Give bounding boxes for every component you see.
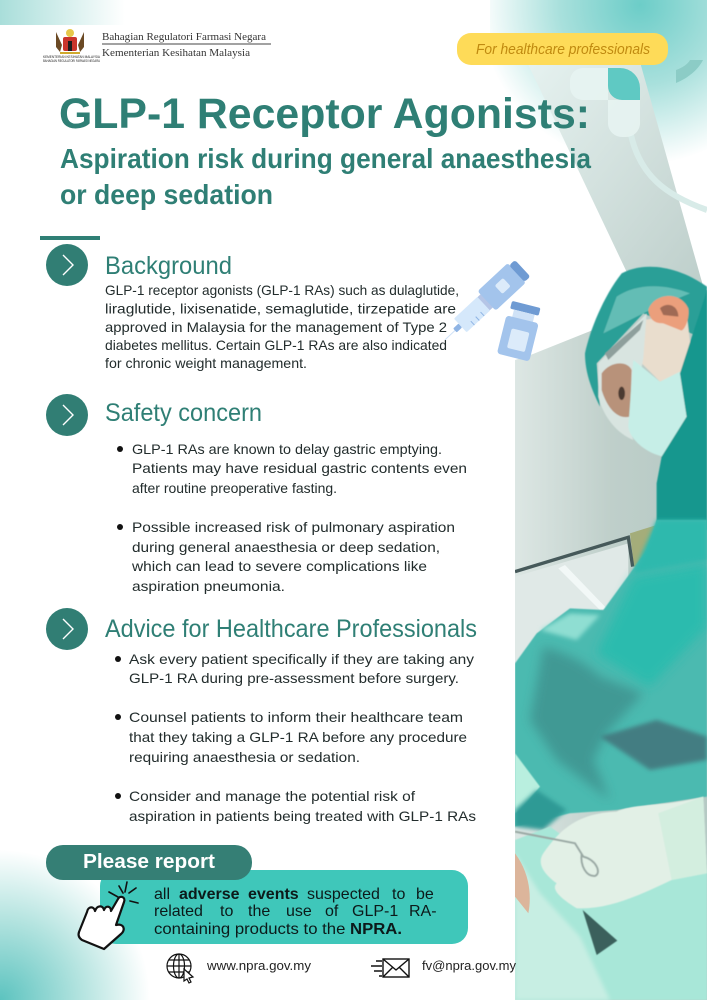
emblem: KEMENTERIAN KESIHATAN MALAYSIA bbox=[43, 55, 101, 59]
text: safety bullets: which can lead to severe complications like bbox=[131, 559, 427, 574]
ministry header: Kementerian Kesihatan Malaysia bbox=[102, 48, 250, 59]
text: safety bullets: aspiration pneumonia. bbox=[132, 579, 285, 594]
text: report instruction: adverse bbox=[179, 886, 240, 903]
scissors bbox=[515, 832, 598, 876]
text: report instruction: use bbox=[286, 903, 312, 920]
surgical photo background bbox=[515, 62, 707, 1000]
text: report instruction: RA- bbox=[409, 903, 437, 920]
surgeon head bbox=[585, 267, 707, 530]
ministry header: Bahagian Regulatori Farmasi Negara bbox=[102, 32, 266, 43]
text: advice bullets bbox=[115, 652, 476, 824]
contact: website: www.npra.gov.my bbox=[206, 958, 311, 973]
audience badge: For healthcare professionals bbox=[476, 41, 650, 58]
subtitle: or deep sedation bbox=[60, 179, 273, 210]
text: advice bullets: Consider and manage the potential risk of bbox=[129, 789, 415, 804]
gloved hand bbox=[515, 797, 707, 908]
text: safety bullets: after routine preoperative fasting. bbox=[132, 481, 337, 496]
badge: please report bbox=[46, 845, 252, 880]
subtitle bbox=[60, 143, 592, 210]
text: report instruction: suspected bbox=[307, 886, 380, 903]
text: advice bullets: Counsel patients to inform their healthcare team bbox=[129, 710, 463, 725]
ceiling arm bbox=[527, 62, 707, 300]
text: advice bullets: GLP-1 RA during pre-assessment before surgery. bbox=[129, 671, 459, 686]
text: advice bullets: that they taking a GLP-1 RA before any procedure bbox=[129, 730, 467, 745]
text: report instruction: containing products to the NPRA. bbox=[154, 921, 402, 938]
text: safety bullets: during general anaesthesia or deep sedation, bbox=[132, 540, 440, 555]
text: report instruction: related bbox=[154, 903, 203, 920]
text: advice bullets: aspiration in patients being treated with GLP-1 RAs bbox=[129, 809, 476, 824]
emblem bbox=[43, 29, 101, 63]
text: report instruction: be bbox=[416, 886, 434, 903]
emblem: BAHAGIAN REGULATORI FARMASI NEGARA bbox=[43, 59, 100, 63]
contact: email bbox=[371, 958, 516, 977]
text: report instruction: GLP-1 bbox=[352, 903, 398, 920]
audience badge bbox=[457, 33, 668, 65]
text: background body: for chronic weight management. bbox=[105, 356, 307, 371]
contact: website bbox=[167, 954, 311, 983]
text: report instruction: of bbox=[325, 903, 339, 920]
logo plus shape bbox=[570, 68, 640, 137]
window and door frame bbox=[515, 526, 655, 638]
corner arc bbox=[676, 60, 703, 83]
text: safety bullets: Patients may have residual gastric contents even bbox=[132, 461, 467, 476]
icon: syringe and vial bbox=[436, 258, 542, 362]
surgical gown bbox=[515, 520, 707, 830]
text: report instruction: to bbox=[392, 886, 405, 903]
icon: chevron circle bbox=[46, 244, 88, 286]
tube bbox=[631, 135, 707, 210]
text: report instruction: all bbox=[154, 886, 170, 903]
text: advice bullets: requiring anaesthesia or sedation. bbox=[129, 750, 360, 765]
icon: envelope bbox=[371, 959, 409, 977]
heading: background: Background bbox=[105, 252, 232, 280]
text: safety bullets: GLP-1 RAs are known to delay gastric emptying. bbox=[132, 442, 442, 457]
text: background body bbox=[105, 283, 459, 371]
panel: background bbox=[46, 244, 459, 371]
text: report instruction bbox=[154, 886, 437, 938]
text: report instruction: to bbox=[220, 903, 233, 920]
text: background body: approved in Malaysia for the management of Type 2 bbox=[105, 320, 447, 335]
wall bbox=[515, 290, 707, 1000]
icon: globe bbox=[167, 954, 193, 983]
panel: please report bbox=[46, 845, 468, 949]
badge: please report: Please report bbox=[83, 850, 215, 873]
lower drape bbox=[515, 827, 707, 1000]
heading: advice: Advice for Healthcare Professionals bbox=[105, 615, 477, 643]
text: report instruction: events bbox=[248, 886, 299, 903]
icon: chevron circle bbox=[46, 608, 88, 650]
ministry header bbox=[43, 29, 271, 63]
panel: advice bbox=[46, 608, 477, 824]
title bbox=[59, 90, 592, 210]
text: report instruction: the bbox=[248, 903, 270, 920]
text: background body: diabetes mellitus. Certain GLP-1 RAs are also indicated bbox=[105, 338, 447, 353]
text: safety bullets: Possible increased risk of pulmonary aspiration bbox=[132, 520, 455, 535]
text: background body: GLP-1 receptor agonists (GLP-1 RAs) such as dulaglutide, bbox=[105, 283, 459, 298]
icon: chevron circle bbox=[46, 394, 88, 436]
panel: safety concern bbox=[46, 394, 467, 594]
heading: safety concern: Safety concern bbox=[105, 399, 262, 427]
text: safety bullets bbox=[117, 442, 467, 594]
subtitle: Aspiration risk during general anaesthesia bbox=[60, 143, 592, 174]
text: background body: liraglutide, lixisenatide, semaglutide, tirzepatide are bbox=[105, 302, 456, 316]
icon: pointing hand bbox=[79, 882, 138, 949]
contact: email: fv@npra.gov.my bbox=[422, 958, 516, 973]
title: GLP-1 Receptor Agonists: bbox=[59, 90, 590, 138]
text: advice bullets: Ask every patient specifically if they are taking any bbox=[129, 652, 474, 667]
